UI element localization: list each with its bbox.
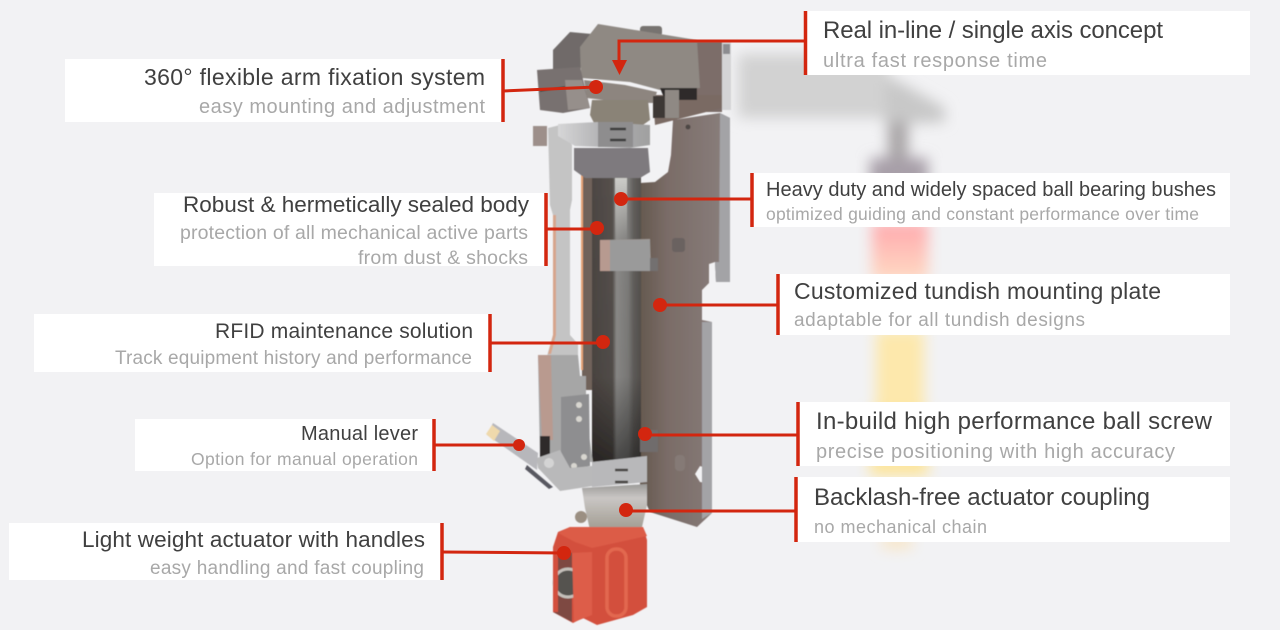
bracket plate bbox=[561, 394, 590, 470]
actuator illustration bbox=[486, 24, 731, 625]
upper bracket bbox=[697, 42, 722, 112]
main cylinder bbox=[592, 170, 641, 465]
callout: 360° flexible arm fixation bbox=[65, 59, 603, 122]
RFID tag bbox=[600, 239, 658, 271]
description: Option for manual operation bbox=[191, 449, 418, 469]
callout: ball bearing bushes bbox=[614, 173, 1230, 227]
blurred background nozzle bbox=[738, 54, 945, 549]
lever bbox=[486, 423, 553, 489]
callout: light weight actuator bbox=[9, 523, 571, 580]
heading: Heavy duty and widely spaced ball bearing bushes bbox=[766, 179, 1216, 201]
callout: real in-line concept bbox=[612, 11, 1250, 75]
cylinder side and orange edge bbox=[582, 170, 593, 390]
description: precise positioning with high accuracy bbox=[816, 441, 1175, 463]
description: ultra fast response time bbox=[823, 50, 1047, 72]
plate bolts bbox=[672, 124, 690, 471]
description: easy mounting and adjustment bbox=[199, 96, 485, 118]
top block bbox=[580, 24, 700, 90]
heading: Backlash-free actuator coupling bbox=[814, 484, 1150, 511]
callout: RFID maintenance bbox=[34, 314, 610, 372]
rear block bbox=[553, 32, 592, 70]
callout: tundish mounting plate bbox=[653, 274, 1230, 335]
heading: RFID maintenance solution bbox=[215, 320, 473, 343]
description: easy handling and fast coupling bbox=[150, 558, 424, 579]
description: adaptable for all tundish designs bbox=[794, 310, 1085, 331]
heading: Robust & hermetically sealed body bbox=[183, 192, 530, 217]
heading: Manual lever bbox=[301, 423, 418, 445]
red motor box bbox=[553, 527, 647, 625]
callout: actuator coupling bbox=[619, 477, 1230, 542]
callout: robust sealed body bbox=[154, 192, 604, 269]
callout: ball screw bbox=[638, 402, 1230, 466]
heading: Customized tundish mounting plate bbox=[794, 278, 1161, 304]
left arm bbox=[547, 125, 578, 356]
lower housing bbox=[538, 355, 593, 462]
collar disc bbox=[584, 80, 657, 103]
plate machined edge bbox=[702, 113, 730, 519]
mounting plate bbox=[640, 113, 730, 527]
left clamp block bbox=[537, 67, 590, 113]
description: no mechanical chain bbox=[814, 517, 987, 537]
neck bbox=[590, 100, 650, 127]
clamp ring bbox=[558, 122, 650, 148]
coupling bbox=[582, 484, 647, 530]
bottom ring bbox=[592, 456, 647, 487]
heading: In-build high performance ball screw bbox=[816, 408, 1213, 435]
lower ring bbox=[574, 148, 650, 178]
hinge bracket bbox=[537, 450, 593, 491]
description line 2: from dust & shocks bbox=[358, 247, 528, 269]
callout: manual lever bbox=[135, 419, 525, 471]
heading: 360° flexible arm fixation system bbox=[144, 64, 485, 90]
description: optimized guiding and constant performance over time bbox=[766, 204, 1199, 224]
description: protection of all mechanical active parts bbox=[180, 222, 528, 244]
heading: Light weight actuator with handles bbox=[82, 527, 425, 552]
heading: Real in-line / single axis concept bbox=[823, 17, 1163, 44]
description: Track equipment history and performance bbox=[115, 348, 472, 369]
